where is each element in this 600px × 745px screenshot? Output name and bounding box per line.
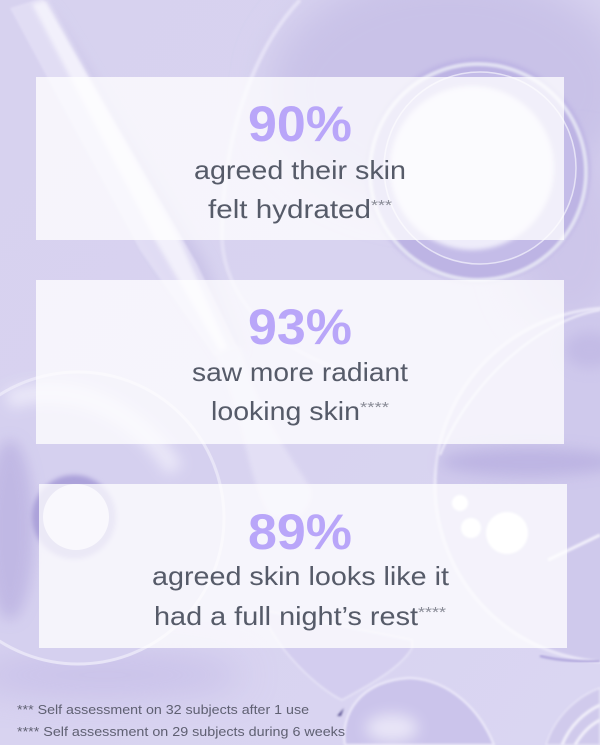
text: agreed their skin: agreed their skin (194, 155, 406, 185)
text: felt hydrated: felt hydrated (208, 194, 371, 224)
footnote 1: *** Self assessment on 32 subjects after 1 use (17, 702, 309, 717)
stat: 89%: 89% (248, 504, 352, 560)
glass pipette (10, 0, 312, 519)
panel: 89% full night's rest (39, 484, 567, 648)
footnote marker: *** (371, 197, 392, 214)
footnote 2: **** Self assessment on 29 subjects during 6 weeks (17, 724, 346, 739)
stat: 90%: 90% (248, 96, 352, 152)
large glass dish top right (222, 0, 600, 378)
cream drops (452, 495, 528, 554)
text: saw more radiant: saw more radiant (192, 357, 409, 387)
petri dish middle right (435, 308, 600, 662)
text: looking skin: looking skin (211, 396, 360, 426)
footnote marker: **** (360, 399, 389, 416)
stat: 93%: 93% (248, 299, 352, 355)
panel: 90% hydrated (36, 77, 564, 240)
bulb flask bottom center (262, 610, 494, 745)
glass dish corner bottom right (546, 688, 600, 745)
footnotes (17, 702, 346, 739)
petri dish top right (366, 58, 590, 282)
text: had a full night's rest: had a full night’s rest (154, 601, 419, 631)
footnote marker: **** (418, 604, 446, 621)
panel: 93% radiant (36, 280, 564, 444)
round flask bottom left (0, 372, 245, 699)
text: agreed skin looks like it: agreed skin looks like it (152, 561, 450, 591)
